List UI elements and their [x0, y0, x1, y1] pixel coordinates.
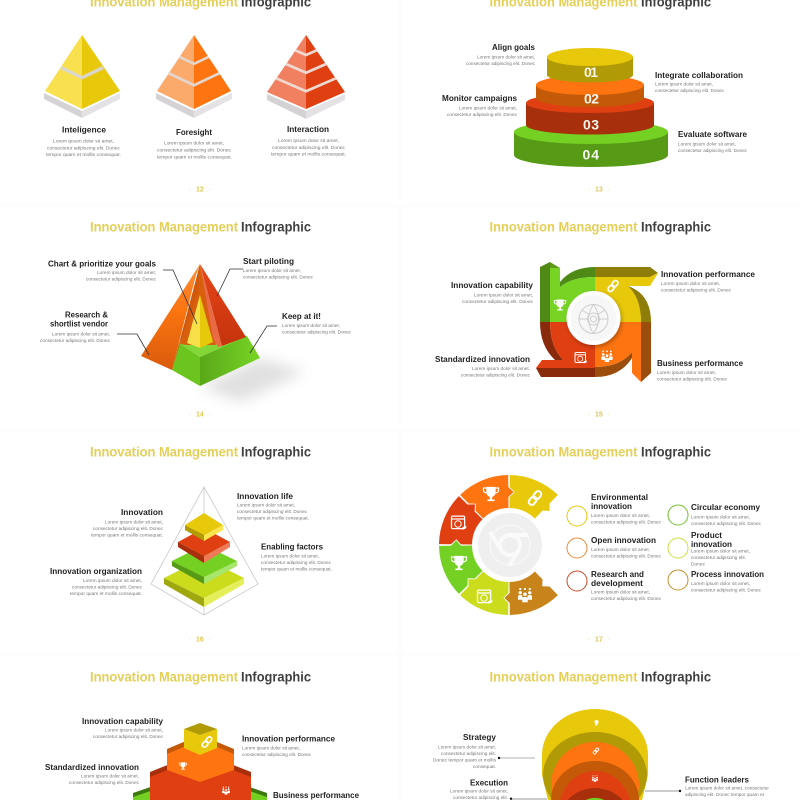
text: Product innovation: Donec: [691, 562, 706, 566]
text: Innovation: Innovation: [121, 507, 163, 517]
text: Innovation performance: consectetur adipiscing elit. Donec: [242, 752, 312, 757]
text: Integrate collaboration: Integrate collaboration: [655, 70, 743, 80]
text: Innovation capability: consectetur adipiscing elit. Donec: [93, 734, 164, 739]
text: Function leaders: adipiscing elit. Donec tempor quam et: [685, 792, 765, 797]
title: Infographic: [641, 220, 711, 234]
text: Innovation performance: consectetur adipiscing elit. Donec: [661, 288, 732, 292]
icon: chain: [201, 736, 213, 748]
text: Execution: Execution: [470, 778, 508, 788]
text: Strategy: Donec tempor quam et mollis: [433, 758, 497, 762]
page number: ›: [209, 637, 211, 643]
numbers on cylinders: 01: [584, 64, 598, 80]
text: Monitor campaigns: [442, 93, 518, 117]
title: Infographic: [641, 444, 711, 460]
page number: ‹: [588, 187, 590, 193]
text: Innovation performance: Innovation performance: [661, 269, 755, 279]
panel: slide 16 layered wire pyramid: [0, 432, 398, 653]
text: Business performance: Lorem ipsum dolor sit amet,: [657, 370, 716, 375]
text: Inteligence: tempor quam et mollis consequat.: [46, 152, 121, 157]
text: Research and development: development: [591, 578, 643, 588]
text: Inteligence: [46, 124, 121, 157]
text: Open innovation: Open innovation: [591, 535, 656, 545]
text: Environmental innovation: Lorem ipsum dolor sit amet,: [591, 513, 650, 518]
text: Innovation life: consectetur adipiscing elit. Donec: [237, 509, 308, 514]
text: Environmental innovation: Environmental: [591, 492, 648, 502]
text: Evaluate software: consectetur adipiscing elit. Donec: [678, 148, 748, 153]
panel: slide 18 stepped pyramid: [0, 657, 398, 800]
text: Foresight: [157, 127, 232, 160]
arrow: yellow quadrant: [595, 267, 658, 322]
text: Keep at it: Lorem ipsum dolor sit amet,: [282, 323, 340, 328]
title: Innovation Management: [490, 444, 638, 460]
text: Innovation performance: Lorem ipsum dolor sit amet,: [661, 281, 720, 286]
text: Innovation capability: Innovation capability: [451, 280, 533, 290]
text: Inteligence: consectetur adipiscing elit. Donec: [47, 146, 121, 150]
title: Infographic: [241, 444, 311, 460]
text: Interaction: Interaction: [287, 124, 329, 134]
text: Monitor campaigns: Lorem ipsum dolor sit amet,: [459, 106, 517, 110]
icon: calendar: [575, 352, 587, 363]
text: Execution: Lorem ipsum dolor sit amet,: [450, 788, 508, 794]
text: Product innovation: Product: [691, 530, 722, 540]
icon: trophy left: [451, 556, 467, 570]
title: Innovation Management: [490, 670, 638, 684]
text: Interaction: Lorem ipsum dolor sit amet,: [278, 138, 339, 143]
ring segment green: [425, 529, 490, 594]
text: Evaluate software: [678, 129, 748, 153]
page number: ‹: [588, 412, 590, 418]
arrow: green quadrant: [540, 262, 595, 322]
text: Start piloting: [243, 256, 314, 280]
text: Enabling factors: [261, 542, 332, 572]
icon: bulb: [594, 720, 598, 726]
text: Enabling factors: Lorem ipsum dolor sit amet,: [261, 554, 319, 558]
text: Research and shortlist vendor: Lorem ipsum dolor sit amet,: [52, 332, 110, 336]
title: [490, 670, 711, 684]
text: Product innovation: consectetur adipiscing elit.: [691, 555, 746, 560]
text: Standardized innovation: [45, 762, 140, 785]
wireframe pyramid: [151, 487, 258, 615]
text: Research and development: [591, 569, 662, 601]
text: Standardized innovation: Standardized innovation: [45, 762, 139, 772]
page number: 12: [196, 186, 204, 194]
text: Business performance: [657, 358, 743, 382]
text: Foresight: consectetur adipiscing elit. Donec: [157, 148, 232, 152]
page number: 15: [595, 412, 603, 418]
text: Environmental innovation: innovation: [591, 501, 632, 511]
text: Product innovation: Lorem ipsum dolor sit amet,: [691, 548, 750, 554]
text: Integrate collaboration: [655, 70, 743, 93]
icon: people: [592, 775, 598, 782]
text: Open innovation: consectetur adipiscing elit. Donec: [591, 554, 662, 558]
text: Strategy: Lorem ipsum dolor sit amet,: [438, 744, 496, 750]
text: Align goals: Align goals: [492, 42, 535, 52]
page number: 14: [196, 412, 204, 418]
text: Environmental innovation: consectetur adipiscing elit. Donec: [591, 520, 662, 524]
text: Interaction: tempor quam et mollis consequat.: [271, 152, 346, 156]
text: Innovation capability: Lorem ipsum dolor sit amet,: [474, 292, 533, 298]
text: Process innovation: Process innovation: [691, 569, 764, 579]
text: Chart and prioritize: consectetur adipiscing elit. Donec: [86, 276, 157, 282]
page number: ›: [608, 637, 610, 643]
icon: trophy top: [483, 487, 499, 501]
text: Align goals: Lorem ipsum dolor sit amet,: [477, 54, 535, 60]
text: Standardized innovation: Standardized innovation: [435, 354, 530, 364]
icon: trophy: [179, 762, 187, 770]
text: Keep at it: consectetur adipiscing elit. Donec: [282, 330, 352, 334]
icon: people: [601, 350, 613, 362]
text: Standardized innovation: consectetur adipiscing elit. Donec: [69, 780, 140, 785]
text: Innovation capability: [82, 716, 164, 739]
text: Circular economy: [691, 502, 762, 526]
text: Inteligence: Inteligence: [62, 124, 106, 134]
text: Standardized innovation: [435, 354, 531, 378]
page number: [588, 636, 610, 644]
icon: people: [222, 786, 230, 794]
cylinder tier 01 yellow: [547, 48, 633, 83]
text: Enabling factors: Enabling factors: [261, 542, 323, 552]
text: Process innovation: Lorem ipsum dolor sit amet,: [691, 581, 750, 586]
page number: 17: [595, 636, 603, 644]
text: Chart and prioritize: [48, 258, 157, 282]
layer yellow: [185, 513, 223, 541]
text: Research and development: consectetur adipiscing elit. Donec: [591, 596, 662, 601]
icon: calendar bottom: [478, 590, 492, 603]
text: Interaction: consectetur adipiscing elit. Donec: [272, 145, 346, 150]
title: Innovation Management: [90, 444, 238, 460]
text: Foresight: Foresight: [176, 127, 212, 137]
text: Strategy: consequat.: [473, 764, 496, 769]
text: Strategy: [433, 732, 497, 769]
title: [90, 444, 311, 460]
pyramid: exploded four parts: [141, 264, 305, 402]
text: Open innovation: [591, 535, 662, 558]
numbers on cylinders: [582, 64, 599, 162]
text: Research and shortlist vendor: consectetur adipiscing elit. Donec: [40, 338, 111, 343]
title: [490, 0, 711, 10]
center disc with globe mark: [566, 291, 620, 345]
text: Innovation performance: Innovation performance: [242, 734, 335, 744]
title: Infographic: [241, 220, 311, 234]
text: Innovation organization: Innovation organization: [50, 566, 142, 576]
title: [490, 444, 711, 460]
text: Integrate collaboration: Lorem ipsum dolor sit amet,: [655, 82, 713, 86]
text: Innovation capability: consectetur adipiscing elit. Donec: [462, 299, 534, 304]
text: Evaluate software: Lorem ipsum dolor sit amet,: [678, 142, 736, 146]
cylinder tier 03 red: [526, 93, 654, 134]
page number: ›: [209, 187, 211, 193]
text: Innovation performance: [661, 269, 755, 292]
text: Innovation performance: [242, 734, 335, 757]
leader dots: [498, 757, 681, 800]
text: Evaluate software: Evaluate software: [678, 129, 747, 139]
pyramid: two-tier yellow: [44, 35, 120, 118]
numbers on cylinders: 03: [583, 116, 599, 132]
page number: ‹: [189, 187, 191, 193]
text: Foresight: Lorem ipsum dolor sit amet,: [164, 140, 224, 146]
page number: [588, 412, 610, 418]
title: Innovation Management: [490, 220, 638, 234]
text: Execution: consectetur adipiscing elit.: [453, 795, 508, 800]
text: Integrate collaboration: consectetur adipiscing elit. Donec: [655, 88, 725, 93]
step red: [150, 752, 251, 800]
icon: people: [518, 588, 532, 602]
panel: slide 17 segmented ring: [402, 432, 800, 653]
ring segment yellow: [509, 475, 558, 518]
title: Innovation Management: [90, 220, 238, 234]
cylinder tier 04 green: [514, 120, 668, 167]
page number: 13: [595, 186, 603, 194]
text: Innovation capability: Lorem ipsum dolor sit amet,: [105, 728, 163, 732]
page number: 16: [196, 636, 204, 644]
ring segment lime: [460, 572, 509, 615]
text: Business performance: Business performance: [657, 358, 743, 368]
text: Inteligence: Lorem ipsum dolor sit amet,: [53, 138, 114, 144]
ring segment brown: [493, 564, 558, 629]
page number: ›: [608, 412, 610, 418]
text: Innovation life: [237, 491, 309, 520]
text: Standardized innovation: Lorem ipsum dolor sit amet,: [472, 366, 530, 371]
text: Innovation performance: Lorem ipsum dolor sit amet,: [242, 746, 300, 750]
text: Environmental innovation: [591, 492, 662, 524]
text: Keep at it: [282, 311, 352, 334]
text: Circular economy: consectetur adipiscing elit. Donec: [691, 521, 762, 526]
text: Circular economy: Lorem ipsum dolor sit amet,: [691, 514, 750, 520]
numbers on cylinders: 02: [584, 90, 599, 106]
title: Infographic: [241, 670, 311, 684]
page number: [189, 186, 211, 194]
text: Innovation: consectetur adipiscing elit. Donec: [93, 526, 164, 531]
icon: chain: [593, 747, 599, 755]
legend circles: [567, 505, 688, 591]
text: Research and development: Research and: [591, 569, 644, 579]
text: Enabling factors: consectetur adipiscing elit. Donec: [261, 560, 332, 565]
page number: [189, 636, 211, 644]
icon: calendar left: [452, 516, 466, 529]
title: [490, 220, 711, 234]
text: Start piloting: Lorem ipsum dolor sit amet,: [243, 268, 301, 273]
layer red: [178, 528, 230, 563]
text: Enabling factors: tempor quam et mollis consequat.: [261, 566, 332, 572]
text: Strategy: Strategy: [463, 732, 496, 742]
text: Process innovation: consectetur adipiscing elit. Donec: [691, 588, 762, 592]
page number: ‹: [189, 412, 191, 418]
text: Innovation: [91, 507, 164, 538]
text: Innovation: Lorem ipsum dolor sit amet,: [105, 520, 163, 524]
icon: chain: [528, 490, 542, 506]
text: Align goals: [466, 42, 536, 66]
text: Interaction: [271, 124, 346, 156]
text: Chart and prioritize: Chart & prioritize your goals: [48, 258, 156, 268]
pyramid: three-tier orange: [156, 35, 232, 118]
title: [90, 0, 311, 10]
panel: slide 14 3D split pyramid: [0, 207, 398, 428]
text: Function leaders: Function leaders: [685, 774, 749, 784]
title: [90, 670, 311, 684]
leader lines: [499, 758, 680, 799]
page number: [189, 412, 211, 418]
panel: slide 13 stacked cylinders: [402, 0, 800, 203]
text: Standardized innovation: Lorem ipsum dolor sit amet,: [81, 774, 139, 778]
title: [90, 220, 311, 234]
text: Product innovation: innovation: [691, 539, 732, 549]
text: Business performance: Business performance: [273, 790, 359, 800]
nested domes: [542, 709, 648, 800]
layer green: [172, 545, 237, 584]
text: Align goals: consectetur adipiscing elit. Donec: [466, 61, 536, 66]
text: Strategy: consectetur adipiscing elit.: [441, 751, 496, 756]
arrow: orange quadrant: [595, 322, 651, 382]
page number: [588, 186, 610, 194]
text: Innovation organization: [50, 566, 143, 596]
panel: slide 15 pinwheel arrows: [402, 207, 800, 428]
page number: ›: [209, 412, 211, 418]
text: Innovation organization: tempor quam et mollis consequat.: [70, 591, 142, 596]
title: Infographic: [641, 670, 711, 684]
page number: ‹: [588, 637, 590, 643]
text: Research and shortlist vendor: [40, 310, 111, 343]
cylinder tier 02 orange: [536, 75, 644, 107]
center grey disc with mark: [478, 513, 542, 577]
text: Open innovation: Lorem ipsum dolor sit amet,: [591, 547, 650, 552]
text: Keep at it: Keep at it!: [282, 311, 321, 321]
text: Innovation capability: [451, 280, 534, 304]
panel: slide 12 three pyramids: [0, 0, 398, 203]
text: Standardized innovation: consectetur adipiscing elit. Donec: [461, 372, 531, 378]
text: Innovation life: Innovation life: [237, 491, 293, 501]
text: Function leaders: Lorem ipsum dolor sit amet, consectetur: [685, 786, 769, 790]
icon: chain: [607, 280, 619, 292]
text: Innovation: tempor quam et mollis consequat.: [91, 532, 163, 538]
numbers on cylinders: 04: [582, 146, 599, 162]
text: Innovation life: Lorem ipsum dolor sit amet,: [237, 502, 295, 508]
step yellow cube: [184, 723, 217, 755]
text: Business performance: consectetur adipiscing elit. Donec: [657, 376, 728, 382]
text: Foresight: tempor quam et mollis consequat.: [157, 154, 232, 160]
text: Monitor campaigns: Monitor campaigns: [442, 93, 517, 103]
text: Circular economy: Circular economy: [691, 502, 760, 512]
ring segment orange: [460, 461, 525, 526]
text: Innovation life: tempor quam et mollis consequat.: [237, 516, 309, 520]
text: Product innovation: [691, 530, 750, 566]
text: Start piloting: Start piloting: [243, 256, 294, 266]
layer lime: [164, 558, 244, 607]
panel: slide 19 nested domes: [402, 657, 800, 800]
page number: ›: [608, 187, 610, 193]
text: Process innovation: [691, 569, 764, 592]
text: Innovation capability: Innovation capability: [82, 716, 163, 726]
title: Innovation Management: [90, 670, 238, 684]
text: Research and shortlist vendor: Research &: [65, 310, 108, 320]
step green: [133, 770, 267, 800]
text: Monitor campaigns: consectetur adipiscing elit. Donec: [447, 112, 518, 117]
text: Chart and prioritize: Lorem ipsum dolor sit amet,: [97, 270, 156, 275]
arrow: red quadrant: [536, 322, 595, 377]
text: Research and development: Lorem ipsum dolor sit amet,: [591, 590, 650, 594]
text: Innovation organization: Lorem ipsum dolor sit amet,: [83, 578, 142, 583]
page number: ‹: [189, 637, 191, 643]
text: Function leaders: [685, 774, 769, 797]
pyramid: four-tier red: [267, 35, 345, 119]
step orange: [167, 735, 234, 782]
text: Research and shortlist vendor: shortlist vendor: [50, 318, 109, 328]
icon: trophy: [554, 300, 566, 310]
text: Start piloting: consectetur adipiscing elit. Donec: [243, 274, 314, 280]
text: Execution: [450, 778, 508, 800]
ring segment red: [439, 496, 482, 545]
text: Innovation organization: consectetur adipiscing elit. Donec: [72, 584, 143, 590]
leader lines: [117, 269, 277, 355]
